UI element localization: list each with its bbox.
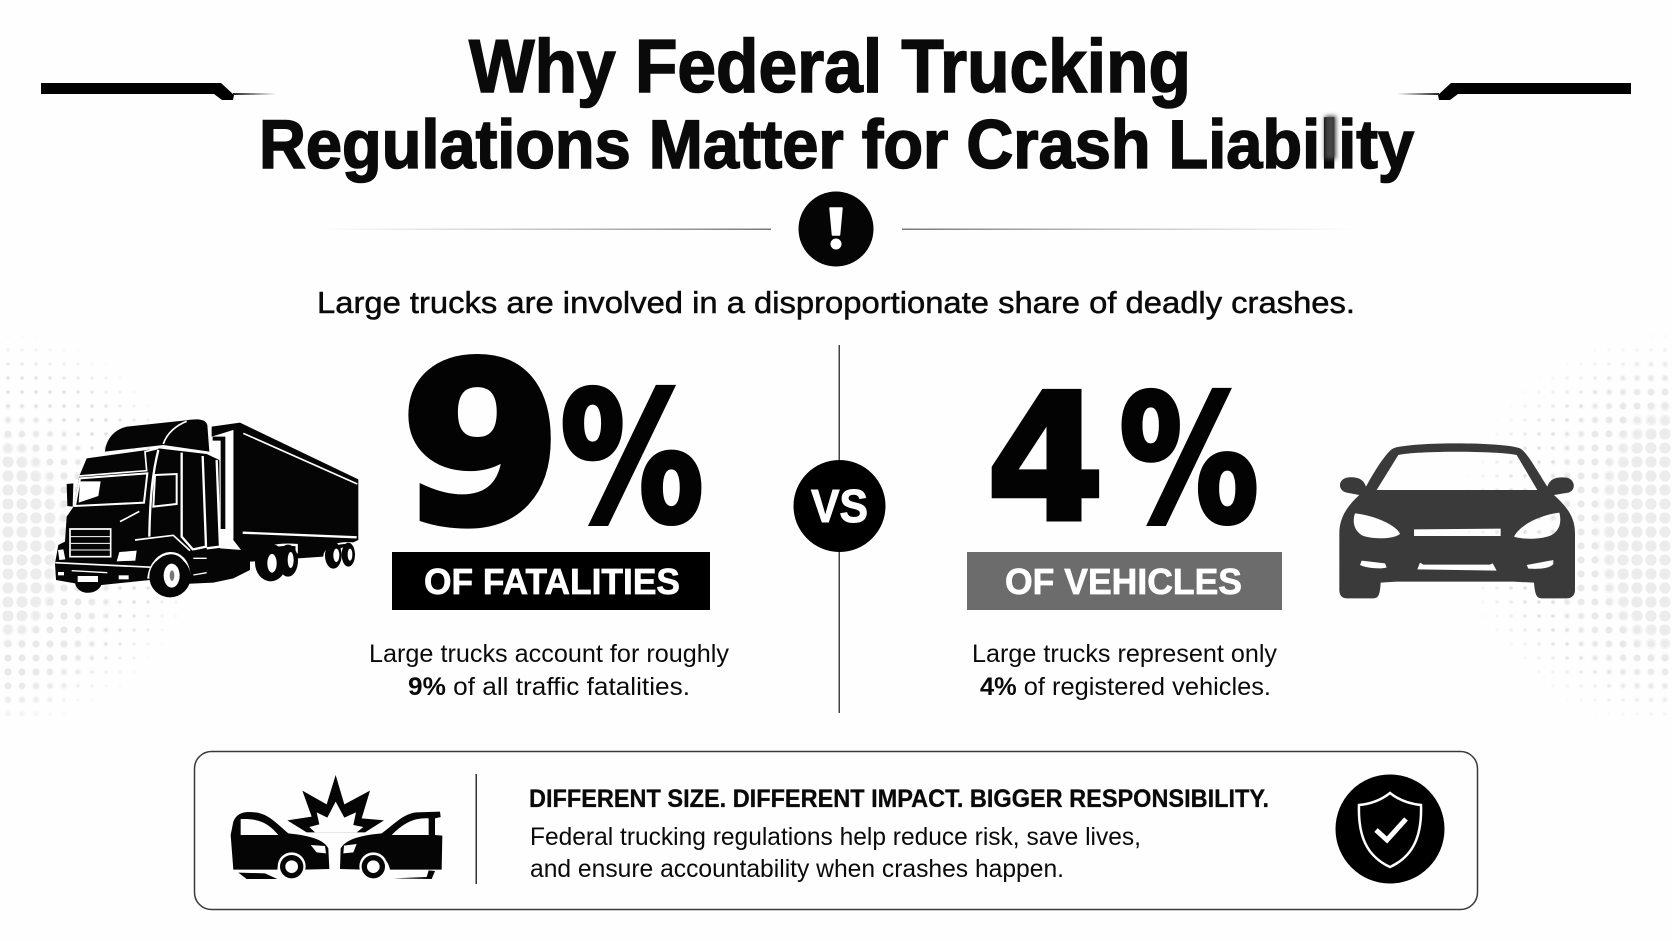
callout text (530, 823, 1141, 883)
description: fatalities: 9% of all traffic fatalities. (408, 673, 690, 701)
title (259, 24, 1414, 183)
icon: truck (55, 419, 358, 597)
icon: crash (231, 775, 442, 880)
callout text: and ensure accountability when crashes happen. (530, 855, 1064, 883)
callout heading: DIFFERENT SIZE. DIFFERENT IMPACT. BIGGER RESPONSIBILITY. (529, 785, 1269, 813)
stat: 4%: % (1119, 358, 1259, 563)
title: Regulations Matter for Crash Liability (259, 106, 1414, 183)
icon: shield (1336, 774, 1444, 884)
description: vehicles: Large trucks represent only (972, 640, 1277, 668)
decorative header bar left (41, 83, 276, 100)
stat: 4%: 4 (986, 358, 1104, 561)
description: fatalities (369, 640, 729, 701)
banner: of vehicles (967, 552, 1282, 610)
description: fatalities: Large trucks account for roughly (369, 640, 729, 668)
stat: 4% (986, 358, 1259, 563)
icon: exclamation (798, 192, 874, 266)
panel divider (476, 774, 477, 884)
divider right of alert icon (902, 228, 1355, 230)
callout text: Federal trucking regulations help reduce risk, save lives, (530, 823, 1141, 851)
banner: of vehicles: OF VEHICLES (1005, 561, 1242, 602)
icon: car (1339, 443, 1575, 598)
vs badge (794, 460, 886, 552)
stat: 9% (400, 317, 704, 575)
decorative header bar right (1396, 83, 1631, 100)
description: vehicles: 4% of registered vehicles. (980, 673, 1271, 701)
vertical divider (838, 345, 840, 713)
divider left of alert icon (318, 228, 771, 230)
stat: 9%: % (560, 355, 704, 564)
banner: of fatalities (392, 552, 710, 610)
panel: bottom callout (194, 752, 1478, 910)
subtitle: Large trucks are involved in a disproportionate share of deadly crashes. (317, 285, 1355, 320)
stat: 9%: 9 (400, 317, 562, 575)
title: Why Federal Trucking (469, 24, 1191, 108)
vs badge: VS (811, 480, 868, 532)
banner: of fatalities: OF FATALITIES (424, 561, 680, 602)
description: vehicles (972, 640, 1277, 701)
